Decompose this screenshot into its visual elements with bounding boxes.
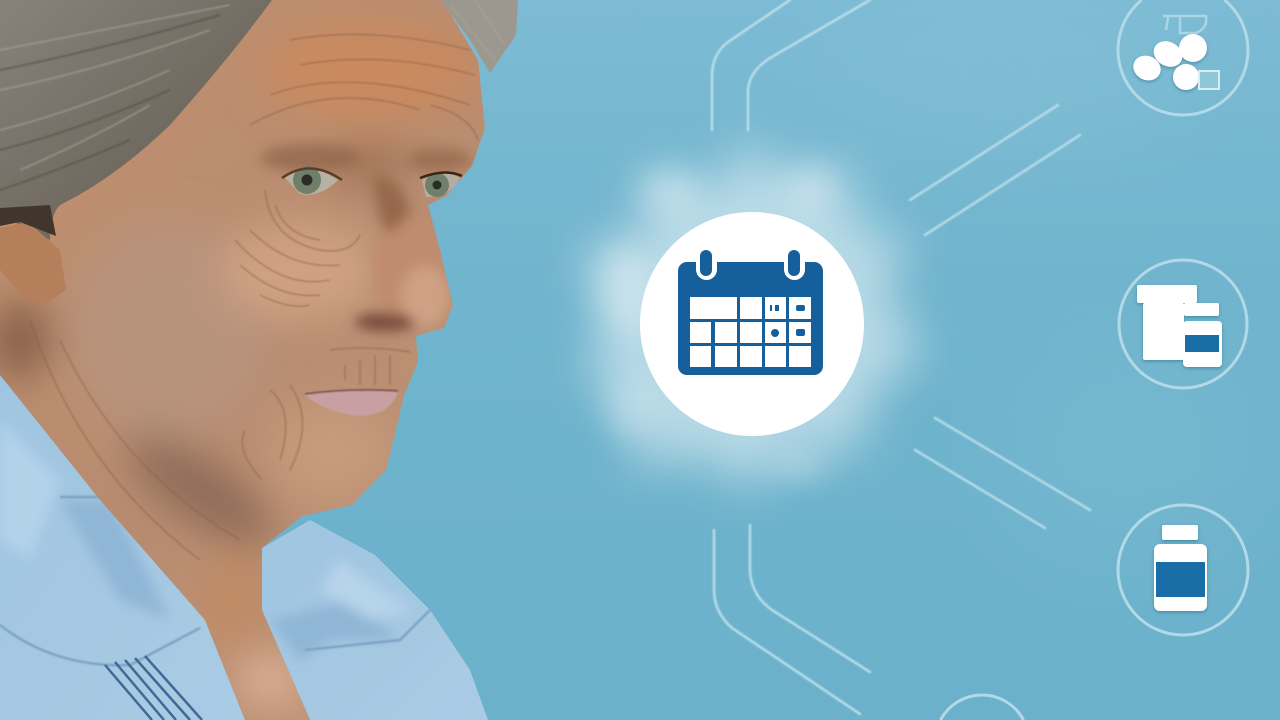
glow behind calendar	[580, 140, 925, 490]
skin shading	[0, 20, 480, 705]
hair: top right tuft	[440, 0, 518, 73]
connector: bottom left	[714, 525, 870, 714]
mouth	[305, 390, 398, 416]
connector: top left	[712, 0, 870, 130]
nose	[355, 175, 449, 331]
hair	[0, 0, 272, 240]
background soft light	[820, 10, 1260, 550]
portrait: elderly woman	[0, 0, 520, 720]
icon: calendar	[678, 249, 823, 375]
ear	[0, 222, 66, 304]
connector: horizontal	[558, 323, 1090, 325]
central calendar badge	[640, 212, 864, 436]
icon circle: bottles	[1119, 260, 1247, 388]
hair shadow above ear	[0, 205, 56, 236]
connector lines	[558, 0, 1090, 714]
hair strands	[0, 0, 505, 170]
skin	[0, 0, 520, 720]
shirt	[0, 375, 488, 720]
connector: lower right	[915, 418, 1090, 528]
eye socket shading	[260, 144, 472, 172]
eyes	[282, 166, 462, 197]
wrinkles	[30, 34, 478, 560]
icon circle: partial bottom	[940, 695, 1024, 720]
icon circle: bottle	[1118, 505, 1248, 635]
connector: upper right	[910, 105, 1080, 235]
icon circle: pills	[1118, 0, 1248, 115]
